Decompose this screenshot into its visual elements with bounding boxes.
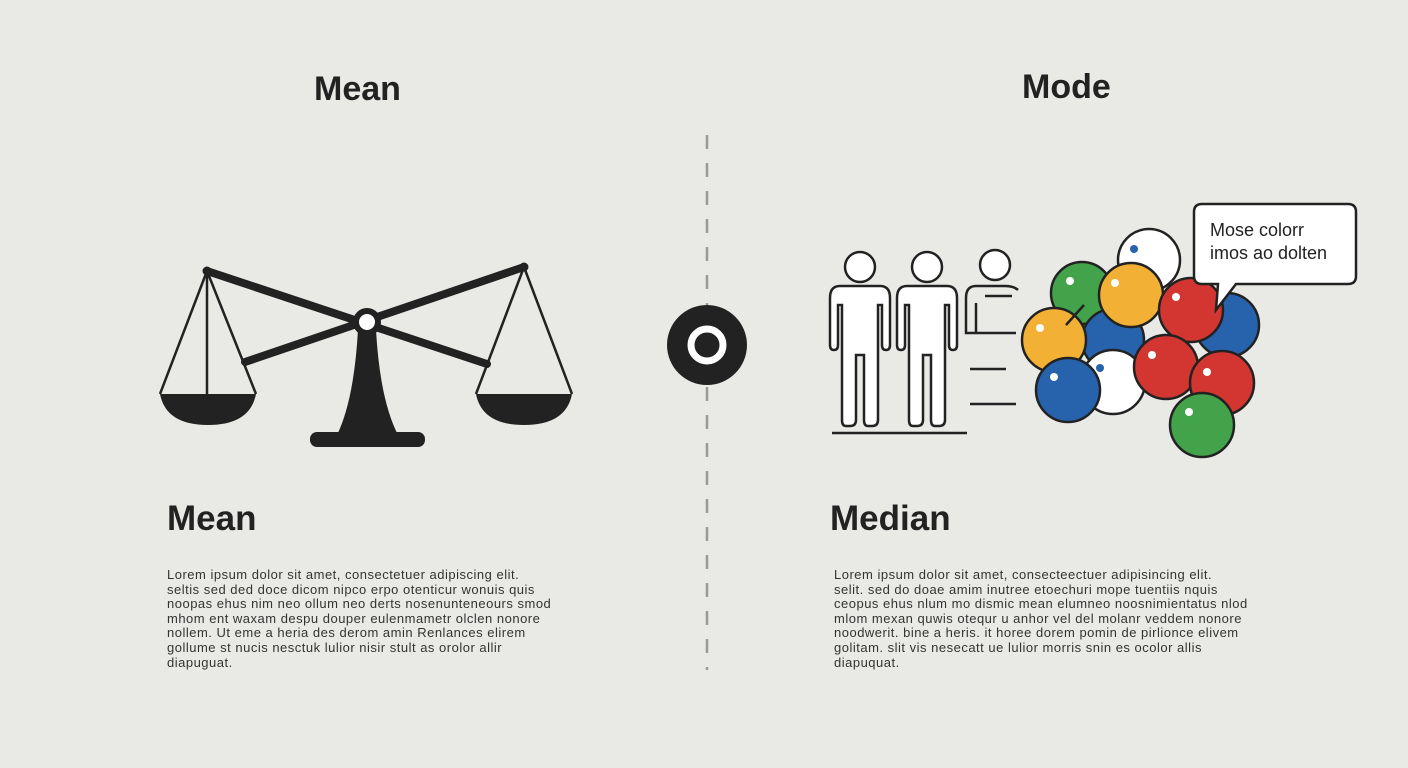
title: Mode top: Mode xyxy=(1022,68,1111,106)
text block: median description: noodwerit. bine a heris. it horee dorem pomin de pirlionce elivem xyxy=(834,625,1239,640)
text block: mean description: Lorem ipsum dolor sit amet, consectetuer adipiscing elit. xyxy=(167,567,519,582)
title: Mean top: Mean xyxy=(314,70,401,108)
text block: mean description: diapuguat. xyxy=(167,655,233,670)
text block: median description: selit. sed do doae amim inutree etoechuri mope tuentiis nquis xyxy=(834,582,1218,597)
callout: speech bubble: Mose colorr xyxy=(1210,220,1304,240)
text block: mean description xyxy=(167,567,551,670)
text block: mean description: seltis sed ded doce dicom nipco erpo otenticur wonuis quis xyxy=(167,582,535,597)
icon: people xyxy=(830,250,1018,433)
heading: Median: Median xyxy=(830,499,951,538)
icon: colored balls xyxy=(1022,229,1259,457)
text block: median description: ceopus ehus nlum mo dismic mean elumneo noosnimientatus nlod xyxy=(834,596,1248,611)
divider line xyxy=(706,135,708,670)
icon: balance scale xyxy=(160,263,572,447)
callout: speech bubble xyxy=(1194,204,1356,310)
text block: median description xyxy=(834,567,1248,670)
heading: Mean: Mean xyxy=(167,499,256,538)
icon: center circle xyxy=(667,305,747,385)
text block: median description: golitam. slit vis nesecatt ue lulior morris snin es ocolor allis xyxy=(834,640,1202,655)
text block: median description: Lorem ipsum dolor sit amet, consecteectuer adipisincing elit. xyxy=(834,567,1212,582)
text block: mean description: gollume st nucis nesctuk lulior nisir stult as orolor allir xyxy=(167,640,502,655)
callout: speech bubble: imos ao dolten xyxy=(1210,243,1327,263)
text block: median description: diapuquat. xyxy=(834,655,900,670)
text block: mean description: nollem. Ut eme a heria des derom amin Renlances elirem xyxy=(167,625,526,640)
text block: mean description: noopas ehus nim neo ollum neo derts nosenunteneours smod xyxy=(167,596,551,611)
text block: mean description: mhom ent waxam despu douper eulenmametr olclen nonore xyxy=(167,611,540,626)
text block: median description: mlom mexan quwis otequr u anhor vel del molanr veddem nonore xyxy=(834,611,1242,626)
